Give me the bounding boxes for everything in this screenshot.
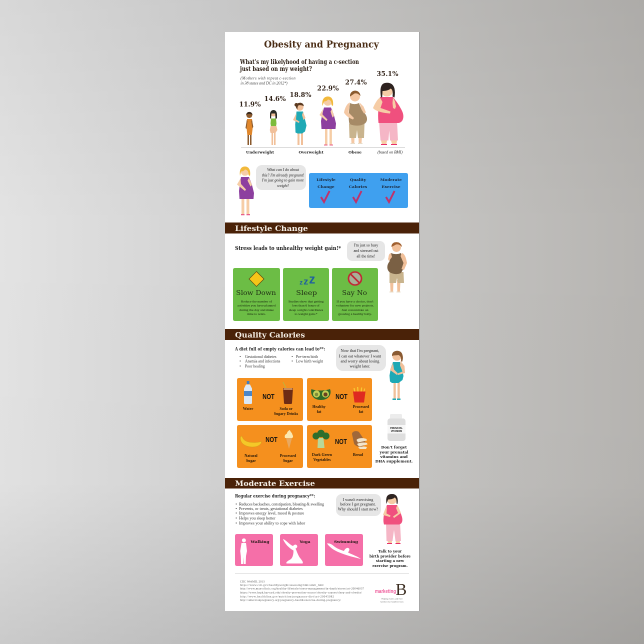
icon: yoga silhouette xyxy=(283,539,303,564)
panel: slow down: Slow Down xyxy=(236,289,277,297)
bullet list: risks xyxy=(240,355,324,368)
speech bubble: eat whatever xyxy=(336,345,386,371)
section header: Quality Calories: Quality Calories xyxy=(235,330,305,340)
panel: three strategies: Calories xyxy=(349,184,368,189)
speech bubble: eat whatever: Now that I'm pregnant, xyxy=(341,348,379,354)
bar of percentages xyxy=(239,70,398,109)
bullet list: risks: Low birth weight xyxy=(296,360,324,364)
panel: natural sugar not processed sugar: NOT xyxy=(266,435,278,444)
speech bubble: wasn't exercising: Why should I start now? xyxy=(338,507,378,512)
bullet list: risks: • xyxy=(240,364,242,368)
section header: Moderate Exercise xyxy=(225,478,419,488)
birth provider note: starting a new xyxy=(376,559,405,563)
panel: healthy fat not processed fat: NOT xyxy=(336,392,348,401)
bar of percentages: 22.9% xyxy=(317,84,339,92)
panel: three strategies: Change xyxy=(318,184,335,189)
icon: ice cream xyxy=(285,430,293,449)
bullet list: risks: • xyxy=(240,355,242,359)
panel: three strategies: Exercise xyxy=(382,184,401,189)
panel: dark green vegetables not bread: Bread xyxy=(353,453,364,457)
panel: dark green vegetables not bread: NOT xyxy=(335,437,347,446)
logo: families live healthier lives xyxy=(380,600,404,604)
speech bubble: busy and stressed: and stressed out xyxy=(354,249,379,253)
empty calories heading: A diet full of empty calories can lead to**: xyxy=(234,347,325,353)
panel: slow down xyxy=(233,268,280,321)
question heading: just based on my weight? xyxy=(239,65,312,73)
speech bubble: wasn't exercising: before I got pregnant. xyxy=(340,502,376,507)
references xyxy=(240,579,364,602)
bar of percentages: 35.1% xyxy=(377,70,398,78)
bullet list: risks: Poor healing xyxy=(245,364,265,368)
figure: blonde woman asking xyxy=(237,166,254,215)
poster sheet xyxy=(225,32,419,611)
icon: walking silhouette xyxy=(240,538,247,564)
speech bubble: eat whatever: I can eat whatever I want xyxy=(339,353,382,358)
panel: natural sugar not processed sugar: Sugar xyxy=(283,459,293,463)
panel: swimming: Swimming xyxy=(334,539,358,544)
section header: Moderate Exercise: Moderate Exercise xyxy=(235,479,315,488)
weight labels: (based on BMI) xyxy=(377,150,403,154)
bullet list: benefits: Helps you sleep better xyxy=(239,515,276,520)
icon: zzz: z xyxy=(304,276,308,288)
bullet list: benefits: • xyxy=(236,502,238,507)
panel: dark green vegetables not bread xyxy=(307,425,372,468)
bar of percentages: 18.8% xyxy=(290,91,311,99)
birth provider note xyxy=(369,550,411,568)
figure: stressed woman xyxy=(387,242,407,292)
birth provider note: exercise program. xyxy=(372,564,408,568)
weight labels: Overweight xyxy=(299,150,324,154)
speech bubble: what can I do xyxy=(256,165,306,190)
panel: water not soda: Water xyxy=(243,407,253,411)
logo: marketing xyxy=(375,589,396,595)
panel: natural sugar not processed sugar: Processed xyxy=(280,454,297,458)
birth provider note: Talk to your xyxy=(378,550,402,554)
figure: teal dress pregnant woman xyxy=(390,351,405,400)
panel: slow down: during the day and make xyxy=(239,308,274,312)
weight labels xyxy=(246,150,403,154)
panel: swimming xyxy=(325,534,363,566)
bullet list: benefits: Improves your ability to cope with labor xyxy=(239,520,306,525)
exercise heading: Regular exercise during pregnancy**: xyxy=(235,493,315,499)
panel: water not soda: Soda or xyxy=(280,407,293,411)
section header: Lifestyle Change: Lifestyle Change xyxy=(235,224,308,233)
data note xyxy=(240,76,296,86)
logo: B xyxy=(396,580,407,599)
bullet list: benefits: Prevents, or treats, gestational diabetes xyxy=(239,506,303,512)
figure: underweight xyxy=(246,112,253,145)
weight labels: Obese xyxy=(348,150,362,154)
question heading: What's my likelyhood of having a c-section xyxy=(239,58,359,66)
panel: walking xyxy=(235,534,273,566)
supplement note xyxy=(375,445,413,464)
panel: three strategies: Quality xyxy=(350,177,367,182)
panel: healthy fat not processed fat xyxy=(307,378,372,421)
panel: sleep: to weight gain.* xyxy=(295,312,318,316)
panel: yoga: Yoga xyxy=(299,539,311,544)
panel: say no: Just concentrate on xyxy=(342,308,369,312)
icon: zzz: z xyxy=(309,272,315,286)
bullet list: risks: • xyxy=(240,360,242,364)
panel: sleep xyxy=(283,268,329,321)
speech bubble: busy and stressed: I'm just so busy xyxy=(354,244,378,248)
supplement note: vitamins and xyxy=(379,454,408,459)
icon: swimming silhouette xyxy=(327,543,361,559)
panel: say no: volunteer for new projects. xyxy=(336,304,374,308)
supplement note: your prenatal xyxy=(379,449,409,454)
panel: three strategies: Moderate xyxy=(380,177,402,182)
panel: three strategies xyxy=(309,173,408,208)
panel: sleep: Sleep xyxy=(296,289,318,297)
panel: slow down: Reduce the number of xyxy=(241,299,273,303)
section header: Quality Calories xyxy=(225,329,419,340)
bullet list: risks: • xyxy=(292,355,294,359)
bar of percentages: 11.9% xyxy=(239,101,261,109)
logo xyxy=(375,580,407,604)
figure: normal weight with teal dress xyxy=(293,103,306,145)
panel: yoga xyxy=(280,534,318,566)
panel: say no: Say No xyxy=(342,289,367,297)
icon: avocado halves xyxy=(311,389,331,400)
panel: healthy fat not processed fat: fat xyxy=(317,410,322,414)
bullet list: benefits: Reduces backaches, constipation, bloating & swelling xyxy=(239,502,324,508)
panel: sleep: Studies show that getting xyxy=(288,299,324,303)
icon: prohibition sign xyxy=(348,272,362,285)
icon: bread xyxy=(352,431,368,449)
panel: say no xyxy=(332,268,378,321)
panel: three strategies: Lifestyle xyxy=(316,177,336,182)
bullet list: risks: Anemia and infections xyxy=(245,360,281,364)
speech bubble: what can I do: this? I'm already pregnant! xyxy=(262,173,305,177)
section header: Lifestyle Change xyxy=(225,222,419,234)
logo: Helping moms and their xyxy=(381,598,403,600)
figure: obese xyxy=(344,91,367,144)
icon: soda glass xyxy=(283,382,293,404)
speech bubble: busy and stressed xyxy=(347,241,385,261)
supplement note: Don't forget xyxy=(381,445,407,450)
panel: say no: If you have a choice, don't xyxy=(337,299,374,304)
references: CDC WebMD. 2013 xyxy=(240,579,265,583)
bullet list: benefits: • xyxy=(236,506,238,511)
icon: yellow diamond xyxy=(249,272,264,286)
bullet list: benefits: • xyxy=(236,515,238,520)
data note: (Mothers with repeat c-section xyxy=(240,76,296,80)
icon: zzz xyxy=(300,272,315,288)
panel: water not soda: NOT xyxy=(262,392,275,401)
references: http://www.mayoclinic.org/healthy-lifestyle/stress-management/in-depth/stress/art-20046037 xyxy=(240,586,364,590)
bullet list: benefits xyxy=(236,502,324,525)
bullet list: risks: Pre-term birth xyxy=(296,355,318,359)
bullet list: benefits: • xyxy=(236,520,238,525)
panel: water not soda xyxy=(237,378,303,421)
panel: sleep: less than 6 hours of xyxy=(292,304,320,308)
speech bubble: what can I do: What can I do about xyxy=(267,168,300,172)
speech bubble: wasn't exercising xyxy=(336,494,381,516)
panel: healthy fat not processed fat: Processed xyxy=(353,405,370,409)
figure: normal weight xyxy=(270,110,277,145)
panel: healthy fat not processed fat: fat xyxy=(359,410,364,414)
weight labels: Underweight xyxy=(246,150,274,154)
speech bubble: eat whatever: weight later. xyxy=(350,364,370,368)
data note: in 38 states and DC in 2012*) xyxy=(240,80,288,86)
birth provider note: birth provider before xyxy=(369,554,411,558)
icon: vitamin bottle: VITAMINS xyxy=(391,430,403,433)
panel: slow down: activities you have planned xyxy=(237,304,276,308)
panel: water not soda: Sugary Drinks xyxy=(274,412,299,416)
panel: say no: growing a healthy baby. xyxy=(338,312,372,316)
panel: walking: Walking xyxy=(250,539,269,544)
bar of percentages: 27.4% xyxy=(345,78,367,86)
panel: sleep: sleep a night contributes xyxy=(289,308,324,312)
speech bubble: busy and stressed: all the time! xyxy=(357,254,375,258)
icon: vitamin bottle xyxy=(388,414,406,441)
stress heading: Stress leads to unhealthy weight gain!* xyxy=(235,246,341,252)
references: https://www.cdc.gov/healthyweight/assessing/bmi/adult_bmi/ xyxy=(240,583,324,587)
speech bubble: what can I do: I'm just going to gain more xyxy=(261,179,304,183)
icon: zzz: z xyxy=(300,280,304,286)
bullet list: benefits: • xyxy=(236,511,238,516)
speech bubble: eat whatever: and worry about losing xyxy=(341,359,380,364)
title: Obesity and Pregnancy xyxy=(264,40,379,50)
panel: natural sugar not processed sugar: Sugar xyxy=(246,459,256,463)
icon: banana xyxy=(240,436,262,447)
bullet list: risks: Gestational diabetes xyxy=(245,355,277,359)
references: http://americanpregnancy.org/pregnancy-health/exercise-during-pregnancy/ xyxy=(240,598,341,602)
bar of percentages: 14.6% xyxy=(264,95,286,103)
figure: obese class 3 xyxy=(373,83,403,145)
figure: pink woman xyxy=(383,494,402,544)
panel: natural sugar not processed sugar: Natural xyxy=(245,454,258,458)
supplement note: DHA supplement. xyxy=(375,459,413,464)
references: https://www.hsph.harvard.edu/obesity-prevention-source/obesity-causes/sleep-and-obesity/ xyxy=(240,591,362,595)
figure: overweight xyxy=(320,96,336,146)
speech bubble: wasn't exercising: I wasn't exercising xyxy=(343,497,373,502)
panel: dark green vegetables not bread: Vegetables xyxy=(313,458,331,462)
bullet list: risks: • xyxy=(292,360,294,364)
panel: healthy fat not processed fat: Healthy xyxy=(312,405,326,409)
baseline rule xyxy=(241,146,405,149)
speech bubble: what can I do: weight! xyxy=(277,184,290,188)
icon: fries xyxy=(353,387,366,402)
icon: broccoli xyxy=(312,430,330,448)
bullet list: benefits: Improves energy level, mood & posture xyxy=(239,511,304,517)
panel: dark green vegetables not bread: Dark Green xyxy=(312,453,333,457)
panel: natural sugar not processed sugar xyxy=(237,425,303,468)
references: http://www.healthline.gov/nutrition/pregnancy-diet/art-20045082 xyxy=(240,594,334,598)
icon: vitamin bottle: PRENATAL xyxy=(390,427,403,430)
icon: water bottle xyxy=(244,381,252,404)
panel: slow down: time to relax. xyxy=(247,312,266,316)
question heading xyxy=(239,58,359,73)
